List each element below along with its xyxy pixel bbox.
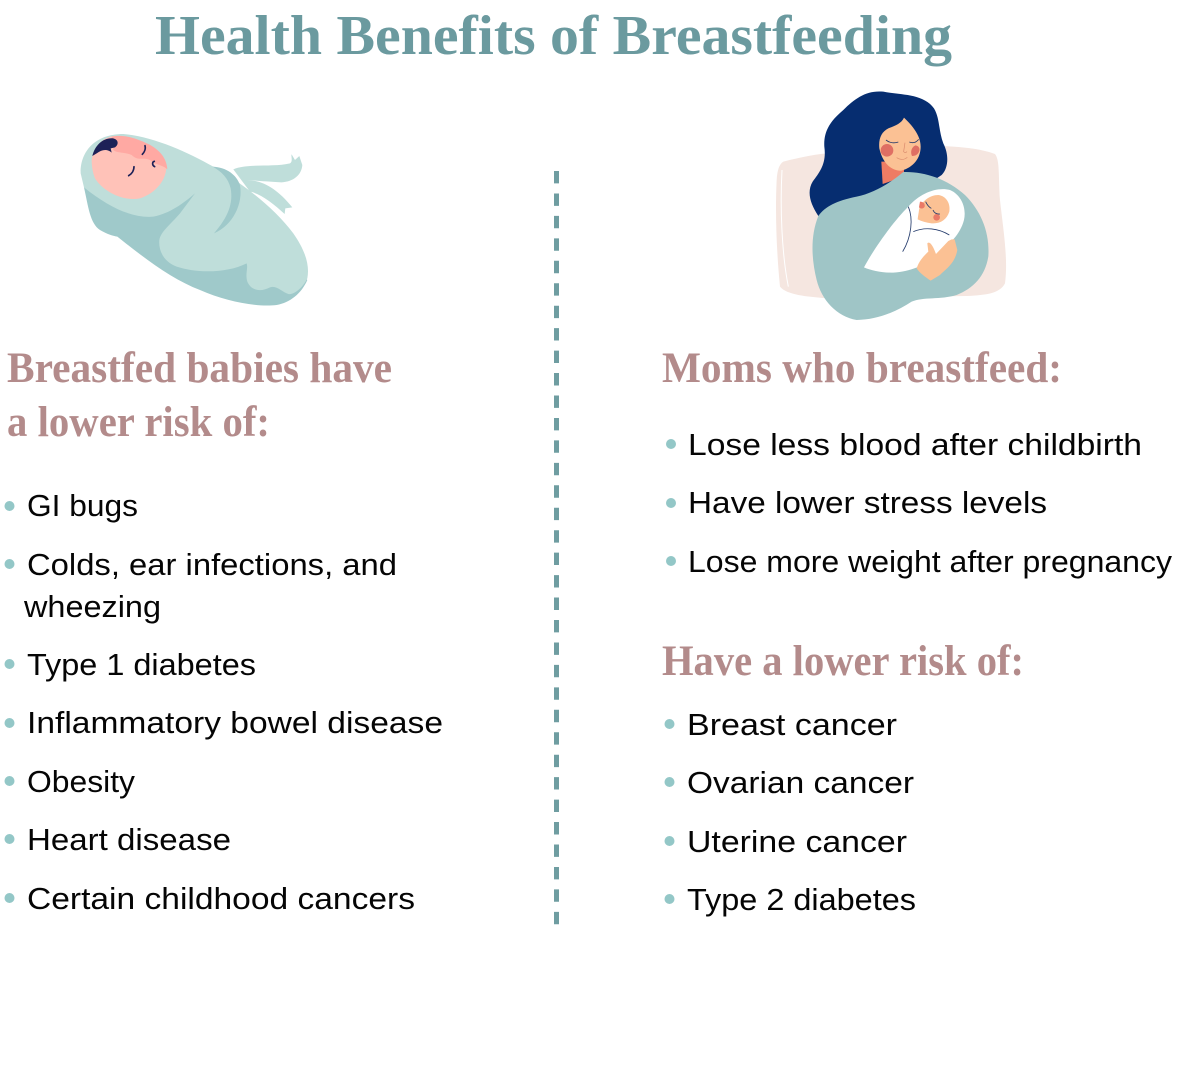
panel: babies <box>4 345 443 916</box>
list: mom risks <box>664 707 916 917</box>
heading: moms: Moms who breastfeed: <box>662 345 1062 392</box>
hand <box>917 239 957 281</box>
hair <box>810 91 947 220</box>
divider: dashed line <box>554 171 559 925</box>
list: baby risks: Heart disease <box>27 822 231 857</box>
heading: babies: Breastfed babies have <box>7 345 392 392</box>
neck <box>881 162 904 184</box>
list: mom risks: Breast cancer <box>687 707 897 742</box>
list: baby risks: Inflammatory bowel disease <box>27 705 443 740</box>
list: mom benefits: Lose less blood after childbirth <box>688 427 1142 462</box>
icon: swaddled baby <box>81 134 308 305</box>
list: mom risks: Type 2 diabetes <box>687 882 916 917</box>
list: baby risks: GI bugs <box>27 488 138 523</box>
title: Health Benefits of Breastfeeding <box>155 5 952 67</box>
body <box>812 172 989 320</box>
heading: babies <box>7 345 392 446</box>
list: baby risks: Obesity <box>27 764 135 799</box>
panel: moms <box>662 345 1173 917</box>
icon: mother holding baby <box>776 91 1006 320</box>
list: mom benefits: Have lower stress levels <box>688 485 1047 520</box>
pillow <box>776 146 1006 298</box>
list: mom risks: Uterine cancer <box>687 824 907 859</box>
swaddled infant <box>864 189 965 273</box>
list: mom risks: Ovarian cancer <box>687 765 914 800</box>
list: baby risks: Certain childhood cancers <box>27 881 415 916</box>
list: baby risks: Colds, ear infections, and <box>27 547 397 582</box>
list: baby risks: Type 1 diabetes <box>27 647 256 682</box>
list: baby risks: wheezing <box>23 589 161 624</box>
list: mom benefits: Lose more weight after pregnancy <box>688 544 1173 579</box>
heading: lower risk: Have a lower risk of: <box>662 638 1024 685</box>
list: mom benefits <box>666 427 1173 579</box>
face <box>879 118 921 171</box>
list: baby risks <box>4 488 443 916</box>
heading: babies: a lower risk of: <box>7 399 270 446</box>
